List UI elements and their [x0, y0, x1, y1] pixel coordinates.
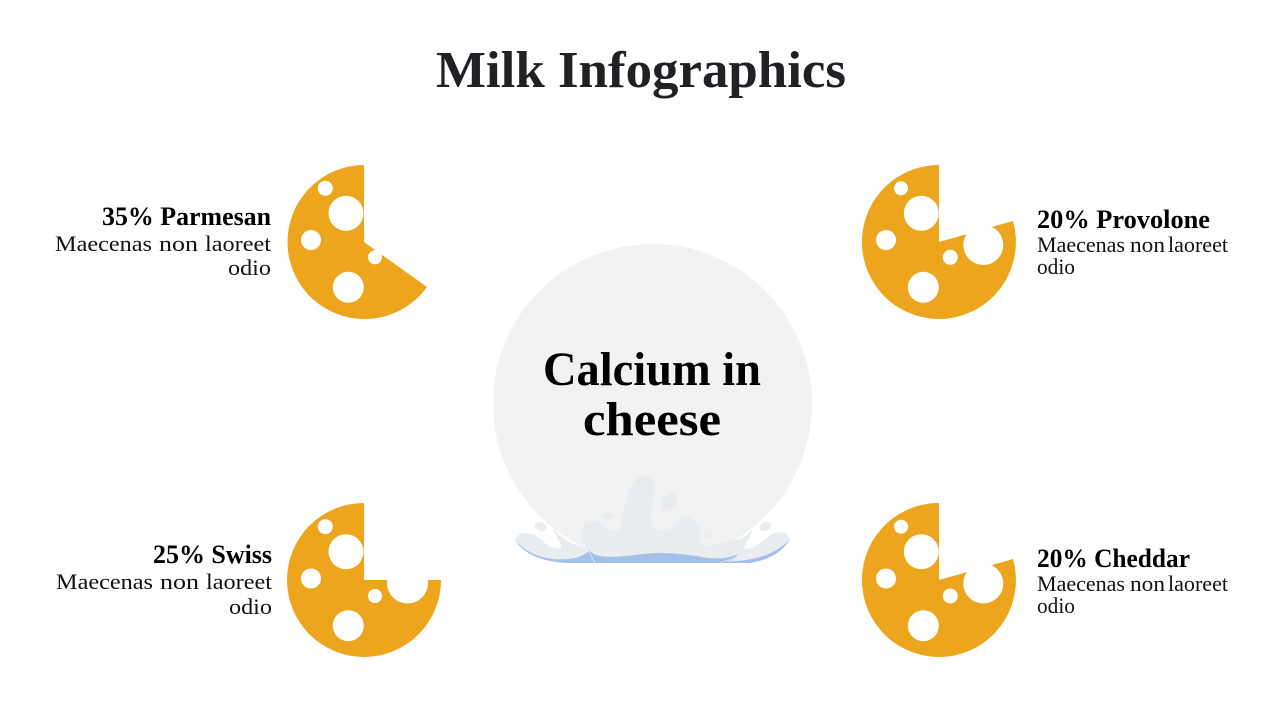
central heading [543, 343, 761, 446]
text block: 25% Swiss: 25% Swiss [153, 540, 272, 569]
background circle [493, 244, 812, 563]
title: Milk Infographics [436, 42, 846, 99]
text block: 35% Parmesan: non [159, 231, 198, 256]
text block: 20% Provolone: odio [1037, 254, 1075, 279]
text block: 20% Cheddar [1037, 544, 1228, 618]
text block: 25% Swiss [56, 540, 272, 619]
text block: 20% Provolone: laoreet [1168, 232, 1228, 257]
central panel: calcium in cheese [493, 244, 812, 563]
text block: 20% Cheddar: 20% Cheddar [1037, 544, 1190, 573]
text block: 20% Cheddar: odio [1037, 593, 1075, 618]
text block: 20% Cheddar: laoreet [1168, 571, 1228, 596]
text block: 35% Parmesan: laoreet [205, 231, 271, 256]
text block: 20% Cheddar: non [1130, 571, 1165, 596]
text block: 25% Swiss: odio [229, 594, 272, 619]
icon: milk splash [515, 475, 790, 563]
central heading: cheese [583, 393, 721, 446]
text block: 20% Provolone [1037, 205, 1228, 279]
text block: 35% Parmesan [55, 202, 272, 280]
text block: 35% Parmesan: Maecenas [55, 231, 152, 256]
icon: cheese 20% provolone [862, 165, 1016, 319]
icon: cheese 25% [287, 503, 441, 657]
text block: 20% Provolone: non [1130, 232, 1165, 257]
text block: 35% Parmesan: 35% Parmesan [102, 202, 272, 231]
icon: cheese 35% [288, 165, 427, 319]
text block: 25% Swiss: laoreet [206, 569, 272, 594]
text block: 25% Swiss: non [160, 569, 199, 594]
text block: 35% Parmesan: odio [228, 255, 271, 280]
icon: cheese 20% cheddar [862, 503, 1016, 657]
central heading: Calcium in [543, 343, 761, 396]
text block: 20% Cheddar: Maecenas [1037, 571, 1125, 596]
text block: 25% Swiss: Maecenas [56, 569, 153, 594]
text block: 20% Provolone: Maecenas [1037, 232, 1125, 257]
text block: 20% Provolone: 20% Provolone [1037, 205, 1210, 234]
